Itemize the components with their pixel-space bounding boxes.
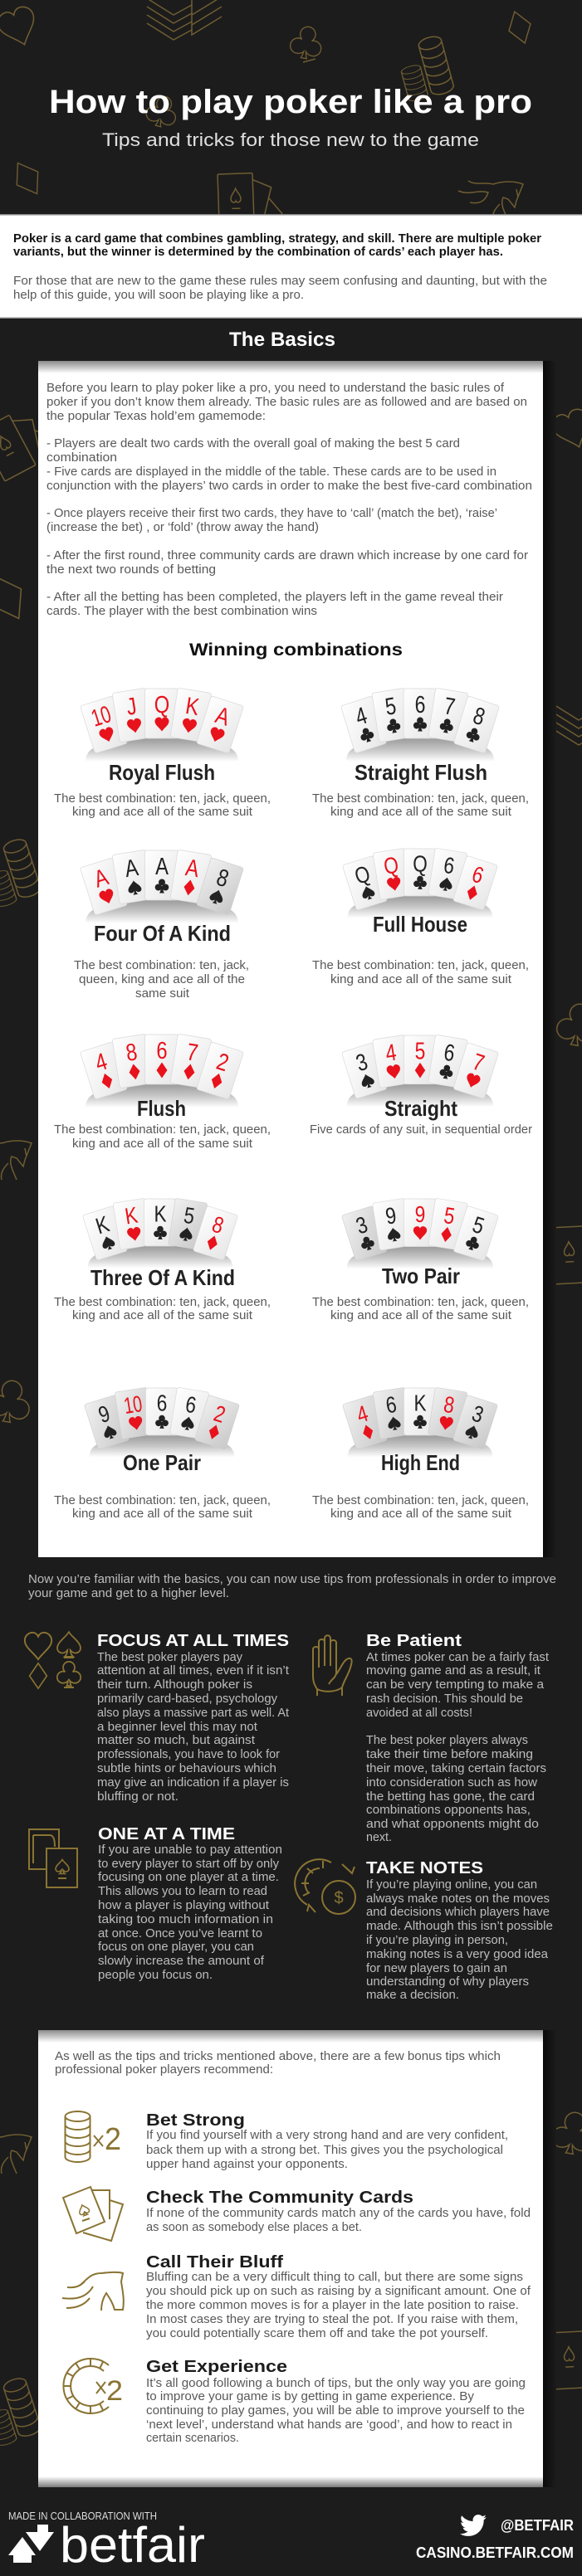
tip: focus at all times: FOCUS AT ALL TIMES	[97, 1632, 289, 1650]
combination: high end: The best combination: ten, jack, queen,	[312, 1493, 529, 1507]
tip: call their bluff: you should pick up on such as raising by a significant amount. One of	[146, 2284, 531, 2298]
tip: one at a time: focus on one player, you can	[98, 1940, 254, 1954]
tip: take notes: for new players to gain an	[366, 1961, 507, 1975]
combination: royal flush: The best combination: ten, jack, queen,	[54, 791, 271, 806]
cards: royal flush: A	[213, 701, 233, 731]
tip: be patient: the betting has gone, the card	[366, 1790, 535, 1804]
tip: one at a time: at once. Once you’ve learnt to	[98, 1926, 262, 1941]
tip: focus at all times	[97, 1632, 290, 1804]
tip: bet strong: back them up with a strong bet. This gives you the psychological	[146, 2143, 503, 2157]
combination: two pair: king and ace all of the same suit	[330, 1308, 512, 1322]
combination: four of a kind: queen, king and ace all of the	[79, 972, 245, 986]
cards: three of a kind: 8	[209, 1212, 227, 1239]
icon: chip and coin	[295, 1859, 355, 1914]
combination: four of a kind	[74, 850, 249, 1001]
combination: straight	[310, 1035, 532, 1137]
cards: three of a kind: K	[123, 1202, 139, 1230]
tip: take notes: If you’re playing online, you can	[366, 1877, 537, 1892]
collaboration note: MADE IN COLLABORATION WITH	[8, 2510, 157, 2522]
intro light text	[13, 274, 547, 302]
cards: royal flush: J	[125, 692, 139, 720]
cards: one pair	[84, 1387, 240, 1458]
tip: check the community cards: Check The Community Cards	[146, 2189, 413, 2207]
combination: three of a kind: king and ace all of the same suit	[72, 1308, 253, 1322]
tip: one at a time: how a player is playing without	[98, 1898, 270, 1912]
cards: one pair: 9	[95, 1401, 113, 1429]
hero heading	[49, 84, 532, 150]
icon: two cards	[29, 1829, 77, 1887]
tip: bet strong	[146, 2111, 508, 2171]
cards: full house	[342, 848, 498, 918]
basic rules text: - Once players receive their first two cards, they have to ‘call’ (match the bet), ‘raise’	[46, 506, 497, 520]
combination: four of a kind: Four Of A Kind	[94, 921, 231, 946]
tip: be patient: their move, taking certain factors	[366, 1761, 546, 1775]
cards: two pair: 5	[469, 1212, 487, 1239]
tip: take notes: making notes is a very good idea	[366, 1947, 549, 1961]
icon: horse	[62, 2272, 124, 2311]
tip: check the community cards	[146, 2189, 531, 2234]
tip: take notes	[366, 1859, 553, 2002]
tip: bet strong: Bet Strong	[146, 2111, 245, 2130]
tip: call their bluff: you could potentially scare them off and take the pot yourself.	[146, 2326, 488, 2340]
tip: be patient: rash decision. This should be	[366, 1692, 523, 1706]
combination: straight flush: king and ace all of the same suit	[330, 805, 512, 819]
twitter handle: @BETFAIR	[501, 2517, 574, 2534]
combination: two pair: Two Pair	[382, 1264, 460, 1288]
tip: focus at all times: may give an indication if a player is	[97, 1775, 289, 1790]
intro light text: For those that are new to the game these rules may seem confusing and daunting, but with the	[13, 274, 547, 288]
tip: focus at all times: a beginner level this may not	[97, 1720, 258, 1734]
cards: one pair: 10	[122, 1391, 144, 1419]
combination: full house	[312, 848, 529, 986]
tip: focus at all times: also plays a massive part as well. At	[97, 1706, 290, 1720]
tips intro text	[28, 1572, 556, 1600]
cards: two pair: 3	[353, 1212, 371, 1239]
cards: straight: 4	[384, 1040, 399, 1067]
icon: chip and coin: $	[334, 1889, 344, 1907]
tip: call their bluff: Bluffing can be a very difficult thing to call, but there are some signs	[146, 2270, 523, 2284]
tip: be patient: can be very tempting to make a	[366, 1678, 545, 1692]
tip: take notes: made. Although this isn’t possible	[366, 1919, 553, 1933]
tip: one at a time: people you focus on.	[98, 1968, 213, 1982]
intro bold text	[13, 231, 541, 259]
combination: full house: Full House	[373, 912, 467, 937]
tip: check the community cards: as soon as somebody else places a bet.	[146, 2220, 362, 2234]
basic rules text: - Five cards are displayed in the middle of the table. These cards are to be used in	[46, 465, 496, 479]
title: How to play poker like a pro	[49, 84, 532, 120]
cards: straight: 3	[353, 1049, 371, 1077]
panel: introduction	[0, 214, 582, 319]
tip: one at a time: focusing on one player at a time.	[98, 1870, 279, 1884]
tip: call their bluff: the more common moves is for a player in the late position to raise.	[146, 2298, 519, 2312]
combination: straight flush	[312, 688, 529, 819]
tip: one at a time	[98, 1825, 282, 1982]
tip: one at a time: slowly increase the amount of	[98, 1954, 265, 1968]
combination: royal flush: king and ace all of the same suit	[72, 805, 253, 819]
cards: four of a kind: A	[90, 863, 112, 893]
cards: flush: 7	[185, 1038, 200, 1067]
combination: flush: king and ace all of the same suit	[72, 1137, 253, 1151]
tip: check the community cards: If none of the community cards match any of the cards you have, fold	[146, 2206, 531, 2220]
combination: four of a kind: same suit	[135, 986, 190, 1001]
combination: three of a kind: The best combination: ten, jack, queen,	[54, 1295, 271, 1309]
cards: one pair: 6	[157, 1390, 167, 1416]
cards: high end: 6	[384, 1392, 399, 1419]
cards: full house: Q	[352, 861, 374, 889]
basic rules text: (increase the bet) , or ‘fold’ (throw away the hand)	[46, 520, 319, 534]
combination: four of a kind: The best combination: ten, jack,	[74, 958, 249, 972]
cards: four of a kind	[80, 850, 244, 923]
combination: straight: Straight	[384, 1096, 457, 1121]
cards: two pair: 9	[415, 1202, 425, 1227]
basic rules text: combination	[46, 450, 117, 465]
cards: high end: 8	[442, 1392, 456, 1419]
intro bold text: Poker is a card game that combines gambling, strategy, and skill. There are multiple poker	[13, 231, 541, 246]
combination: flush	[54, 1034, 271, 1151]
basic rules text: the popular Texas hold’em gamemode:	[46, 409, 266, 423]
intro light text: help of this guide, you will soon be playing like a pro.	[13, 288, 304, 302]
tip: bet strong: If you find yourself with a very strong hand and are very confident,	[146, 2128, 508, 2142]
tip: take notes: if you’re playing in person,	[366, 1933, 508, 1947]
tip: be patient: The best poker players always	[366, 1733, 528, 1747]
tip: take notes: always make notes on the moves	[366, 1892, 550, 1906]
cards: one pair: 2	[211, 1401, 228, 1429]
combination: straight flush: The best combination: ten, jack, queen,	[312, 791, 529, 806]
tip: one at a time: This allows you to learn to read	[98, 1884, 267, 1898]
cards: three of a kind: K	[93, 1211, 113, 1239]
combination: high end: High End	[381, 1450, 460, 1475]
tip: be patient: avoided at all costs!	[366, 1706, 472, 1720]
cards: one pair: 6	[183, 1392, 198, 1419]
basic rules text: conjunction with the players’ two cards in order to make the best five-card combination	[46, 479, 532, 493]
cards: two pair: 5	[442, 1203, 457, 1230]
subtitle: Tips and tricks for those new to the game	[102, 129, 479, 150]
icon: community cards	[63, 2187, 123, 2241]
cards: straight: 7	[469, 1049, 487, 1077]
cards: royal flush: Q	[154, 691, 169, 718]
combination: flush: The best combination: ten, jack, queen,	[54, 1122, 271, 1137]
bonus intro text	[55, 2049, 501, 2077]
cards: straight flush: 7	[443, 692, 457, 721]
cards: four of a kind: A	[155, 853, 169, 880]
cards: full house: Q	[413, 851, 428, 877]
tip: focus at all times: primarily card-based, psychology	[97, 1692, 277, 1706]
combination: high end: king and ace all of the same suit	[330, 1507, 512, 1521]
tip: focus at all times: attention at all times, even if it isn’t	[97, 1663, 290, 1678]
basic rules text: the next two rounds of betting	[46, 562, 216, 577]
tip: call their bluff: In most cases they are trying to steal the pot. If you raise with them,	[146, 2312, 518, 2326]
combination: straight: Five cards of any suit, in sequential order	[310, 1122, 532, 1137]
tip: focus at all times: The best poker players pay	[97, 1650, 242, 1664]
bonus intro text: professional poker players recommend:	[55, 2062, 273, 2077]
cards: four of a kind: A	[123, 854, 140, 883]
cards: straight flush: 8	[470, 701, 488, 731]
cards: two pair	[341, 1198, 499, 1269]
panel: bonus tips	[38, 2030, 556, 2487]
tip: focus at all times: subtle hints or behaviours which	[97, 1761, 276, 1775]
tip: get experience: continuing to play games, you will be able to improve yourself to the	[146, 2403, 525, 2418]
cards: high end	[342, 1387, 498, 1458]
tip: focus at all times: professionals, you have to look for	[97, 1747, 280, 1761]
cards: high end: 3	[469, 1401, 487, 1429]
combination: full house: The best combination: ten, jack, queen,	[312, 958, 529, 972]
basic rules text: cards. The player with the best combination wins	[46, 604, 317, 618]
betfair logo: betfair	[60, 2517, 205, 2573]
intro bold text: variants, but the winner is determined by the combination of cards’ each player has.	[13, 245, 503, 259]
tip: be patient: moving game and as a result, it	[366, 1663, 541, 1678]
tip: one at a time: to every player to start off by only	[98, 1857, 279, 1871]
tip: call their bluff: Call Their Bluff	[146, 2253, 283, 2272]
basic rules text: poker if you don’t know them already. The basic rules are as followed and are based on	[46, 395, 527, 409]
icon: chip stack times two: 2	[105, 2122, 121, 2157]
icon: chip times two: 2	[106, 2375, 123, 2407]
cards: full house: 6	[469, 862, 487, 889]
cards: royal flush	[80, 688, 244, 762]
tip: get experience: certain scenarios.	[146, 2431, 239, 2445]
cards: high end: K	[413, 1390, 427, 1416]
cards: flush: 2	[213, 1048, 232, 1077]
cards: straight flush: 5	[384, 692, 398, 721]
cards: full house: 6	[442, 853, 456, 879]
combination: high end	[312, 1387, 529, 1521]
combination: royal flush: Royal Flush	[109, 760, 215, 785]
tip: bet strong: upper hand against your opponents.	[146, 2157, 348, 2171]
combination: one pair	[54, 1387, 271, 1521]
icon: twitter bird	[460, 2515, 487, 2536]
tip: be patient: next.	[366, 1830, 392, 1844]
tips intro text: Now you’re familiar with the basics, you can now use tips from professionals in order to improve	[28, 1572, 556, 1586]
panel: professional tips	[0, 1557, 582, 2030]
cards: straight: 5	[415, 1039, 425, 1064]
cards: straight	[341, 1035, 499, 1107]
icon: chip stack times two	[65, 2111, 121, 2162]
tip: take notes: and decisions which players have	[366, 1905, 550, 1919]
cards: three of a kind: K	[154, 1201, 167, 1227]
cards: three of a kind: 5	[182, 1203, 196, 1230]
tip: one at a time: taking too much information in	[98, 1912, 273, 1926]
bonus intro text: As well as the tips and tricks mentioned above, there are a few bonus tips which	[55, 2049, 501, 2063]
combination: royal flush	[54, 688, 271, 819]
basic rules text: - Players are dealt two cards with the overall goal of making the best 5 card	[46, 436, 460, 450]
combination: full house: king and ace all of the same suit	[330, 972, 512, 986]
tip: get experience: to improve your game is by getting in game experience. By	[146, 2389, 475, 2403]
tip: take notes: TAKE NOTES	[366, 1859, 483, 1877]
cards: straight flush	[340, 688, 500, 762]
heading: winning combinations: Winning combinations	[189, 640, 403, 660]
tip: be patient: At times poker can be a fairly fast	[366, 1650, 550, 1664]
cards: straight flush: 6	[415, 690, 425, 718]
panel: the basics	[38, 361, 556, 1557]
icon: chip times two	[63, 2359, 123, 2413]
tip: get experience	[146, 2358, 526, 2445]
cards: full house: Q	[382, 852, 400, 879]
tip: focus at all times: bluffing or not.	[97, 1790, 179, 1804]
cards: straight flush: 4	[352, 701, 370, 731]
combination: three of a kind: Three Of A Kind	[90, 1265, 235, 1290]
tip: be patient: and what opponents might do	[366, 1817, 539, 1831]
combination: flush: Flush	[137, 1096, 186, 1121]
combination: one pair: The best combination: ten, jack, queen,	[54, 1493, 271, 1507]
basic rules text: - After the first round, three community cards are drawn which increase by one card for	[46, 548, 528, 562]
tip: get experience: ‘next level’, understand what hands are ‘good’, and how to react in	[146, 2418, 512, 2432]
cards: four of a kind: 8	[213, 864, 232, 893]
cards: straight: 6	[442, 1040, 457, 1067]
combination: one pair: One Pair	[123, 1450, 201, 1475]
cards: flush	[80, 1034, 244, 1108]
website: CASINO.BETFAIR.COM	[416, 2544, 574, 2561]
combination: two pair: The best combination: ten, jack, queen,	[312, 1295, 529, 1309]
icon: raised hand	[313, 1635, 352, 1696]
combination: two pair	[312, 1198, 529, 1322]
basic rules text	[46, 381, 532, 618]
cards: royal flush: K	[183, 692, 201, 721]
cards: two pair: 9	[384, 1203, 399, 1230]
tip: one at a time: If you are unable to pay attention	[98, 1843, 282, 1857]
tips intro text: your game and get to a higher level.	[28, 1586, 229, 1600]
combination: three of a kind	[54, 1198, 271, 1322]
basic rules text: - After all the betting has been completed, the players left in the game reveal their	[46, 590, 503, 604]
tip: take notes: understanding of why players	[366, 1975, 529, 1989]
tip: get experience: It’s all good following a bunch of tips, but the only way you are going	[146, 2376, 526, 2390]
tip: be patient	[366, 1632, 550, 1844]
tip: call their bluff	[146, 2253, 531, 2340]
cards: royal flush: 10	[88, 700, 115, 732]
icon: four suits	[25, 1632, 81, 1688]
cards: flush: 4	[91, 1048, 110, 1077]
cards: four of a kind: A	[183, 854, 201, 883]
tip: be patient: into consideration such as how	[366, 1775, 537, 1790]
footer	[0, 2487, 582, 2576]
tip: focus at all times: matter so much, but against	[97, 1733, 256, 1747]
tip: focus at all times: their turn. Although poker is	[97, 1678, 252, 1692]
combination: straight flush: Straight Flush	[355, 760, 487, 785]
tip: be patient: take their time before making	[366, 1747, 533, 1761]
tip: get experience: Get Experience	[146, 2358, 287, 2376]
cards: three of a kind	[82, 1198, 238, 1269]
combination: one pair: king and ace all of the same suit	[72, 1507, 253, 1521]
tip: be patient: combinations opponents has,	[366, 1803, 531, 1817]
tip: be patient: Be Patient	[366, 1632, 462, 1650]
heading: The Basics: The Basics	[229, 329, 335, 351]
cards: flush: 6	[156, 1037, 168, 1064]
tip: one at a time: ONE AT A TIME	[98, 1825, 235, 1843]
cards: high end: 4	[354, 1401, 371, 1429]
tip: take notes: make a decision.	[366, 1988, 459, 2002]
cards: flush: 8	[124, 1038, 139, 1067]
basic rules text: Before you learn to play poker like a pro, you need to understand the basic rules of	[46, 381, 505, 395]
